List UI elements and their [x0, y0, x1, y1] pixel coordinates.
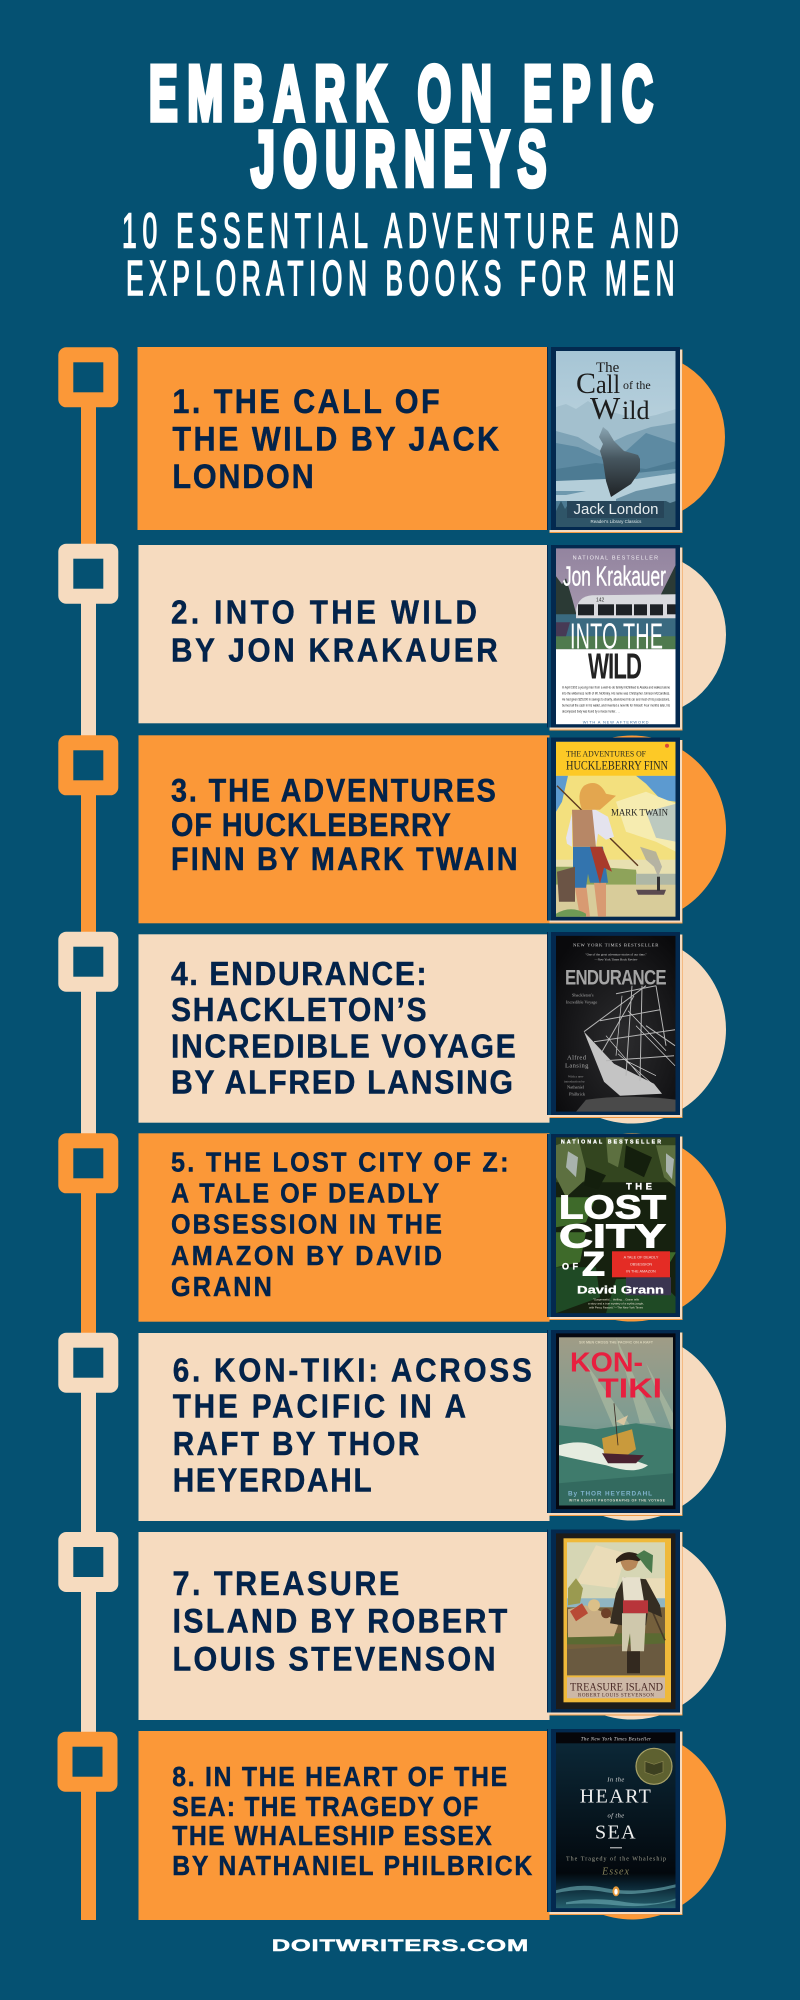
book cover: The Adventures of Huckleberry Finn: THE ADVENTURES OF: [566, 749, 646, 759]
book title: A TALE OF DEADLY: [171, 1177, 439, 1209]
timeline node 2: [58, 544, 118, 737]
book title: [171, 773, 518, 877]
book title: SHACKLETON’S: [171, 991, 427, 1028]
book cover: Kon-Tiki: WITH EIGHTY PHOTOGRAPHS OF THE VOYAGE: [569, 1498, 666, 1502]
timeline node 6: [58, 1333, 118, 1534]
book cover: The Lost City of Z: "Suspenseful… thrilling… Grann tells: [593, 1297, 640, 1301]
semicircle: [538, 1134, 726, 1322]
card: [138, 545, 550, 723]
book cover: Endurance: With a new: [568, 1075, 584, 1079]
book cover: The Lost City of Z: NATIONAL BESTSELLER: [561, 1139, 661, 1145]
book cover: In the Heart of the Sea: The Tragedy of the Whaleship: [566, 1855, 666, 1862]
panel: book 6: [138, 1330, 726, 1521]
book cover: In the Heart of the Sea: [547, 1729, 682, 1915]
book cover: The Call of the Wild: Jack London: [574, 501, 658, 518]
timeline node 8: [58, 1732, 118, 1920]
panel: book 2: [138, 545, 726, 730]
book title: [171, 955, 516, 1101]
panel: book 4: [138, 932, 726, 1124]
book cover: The Lost City of Z: CITY: [559, 1217, 666, 1254]
book title: [172, 1565, 508, 1678]
book cover: Treasure Island: TREASURE ISLAND: [570, 1679, 663, 1693]
book cover: The Lost City of Z: with Percy Fawcett."—The New York Times: [589, 1305, 643, 1309]
book cover: The Call of the Wild: Reader's Library Classics: [591, 519, 642, 524]
semicircle: [538, 1532, 726, 1720]
book cover: Endurance: [547, 932, 682, 1118]
book cover: The Lost City of Z: David Grann: [577, 1284, 664, 1296]
book cover: Endurance: introduction by: [564, 1080, 585, 1084]
book title: 5. THE LOST CITY OF Z:: [171, 1146, 509, 1178]
card: [138, 1333, 550, 1521]
book cover: Endurance: Lansing: [565, 1063, 589, 1070]
book cover: The Lost City of Z: A TALE OF DEADLY: [624, 1255, 659, 1259]
book title: THE WILD BY JACK: [172, 420, 500, 458]
book title: AMAZON BY DAVID: [171, 1240, 442, 1271]
book title: ISLAND BY ROBERT: [172, 1602, 508, 1640]
book title: 1. THE CALL OF: [172, 383, 440, 420]
book cover: The Lost City of Z: OF: [562, 1261, 578, 1271]
timeline node 7: [58, 1532, 118, 1734]
book cover: The Lost City of Z: Z: [582, 1245, 605, 1283]
book cover: Treasure Island: [547, 1530, 682, 1716]
book cover: In the Heart of the Sea: In the: [606, 1776, 625, 1783]
book title: THE WHALESHIP ESSEX: [172, 1820, 492, 1851]
book title: INCREDIBLE VOYAGE: [171, 1027, 516, 1065]
book title: HEYERDAHL: [173, 1462, 372, 1499]
book title: FINN BY MARK TWAIN: [171, 842, 518, 877]
semicircle: [555, 352, 725, 522]
book cover: Endurance: Shackleton's: [572, 993, 594, 998]
semicircle: [538, 1332, 726, 1520]
book cover: The Lost City of Z: IN THE AMAZON: [626, 1269, 656, 1273]
subtitle: 10 ESSENTIAL ADVENTURE AND: [122, 204, 679, 259]
title: JOURNEYS: [251, 116, 546, 203]
book title: RAFT BY THOR: [173, 1426, 420, 1462]
book cover: The Adventures of Huckleberry Finn: MARK TWAIN: [611, 808, 668, 818]
book cover: The Call of the Wild: ild: [622, 396, 649, 425]
book cover: The Call of the Wild: C: [576, 367, 596, 400]
subtitle: [122, 204, 679, 306]
book title: 8. IN THE HEART OF THE: [172, 1761, 507, 1792]
timeline node 1: [58, 347, 118, 546]
semicircle: [562, 552, 726, 716]
book title: 2. INTO THE WILD: [171, 594, 477, 631]
card: [138, 735, 550, 923]
book cover: The Call of the Wild: all: [596, 370, 620, 399]
book cover: Kon-Tiki: SIX MEN CROSS THE PACIFIC ON A RAFT: [579, 1340, 654, 1344]
book title: OBSESSION IN THE: [171, 1208, 442, 1240]
book cover: In the Heart of the Sea: HEART: [580, 1785, 652, 1807]
book title: [173, 1352, 532, 1499]
book title: 3. THE ADVENTURES: [171, 773, 496, 809]
book cover: Endurance: Alfred: [567, 1055, 587, 1062]
book title: BY JON KRAKAUER: [171, 632, 498, 669]
book cover: In the Heart of the Sea: Essex: [601, 1866, 630, 1877]
book cover: Into the Wild: NATIONAL BESTSELLER: [573, 555, 659, 561]
panel: book 3: [138, 735, 726, 924]
title: [149, 51, 653, 203]
semicircle: [538, 936, 726, 1124]
book cover: Endurance: Nathaniel: [567, 1085, 585, 1090]
book cover: The Adventures of Huckleberry Finn: [547, 738, 682, 924]
card: [138, 1133, 550, 1322]
book cover: The Lost City of Z: LOST: [559, 1188, 666, 1225]
book cover: Kon-Tiki: KON-: [570, 1346, 643, 1377]
book cover: In the Heart of the Sea: SEA: [595, 1821, 637, 1843]
card: [138, 1731, 550, 1920]
card: [138, 1532, 550, 1720]
book title: [172, 1761, 532, 1881]
panel: book 8: [138, 1729, 726, 1920]
book title: SEA: THE TRAGEDY OF: [172, 1791, 478, 1822]
book cover: Into the Wild: 142: [596, 597, 605, 603]
book cover: The Call of the Wild: [547, 347, 682, 533]
book cover: Into the Wild: Jon Krakauer: [563, 560, 666, 591]
book title: 7. TREASURE: [172, 1565, 399, 1602]
book cover: The Lost City of Z: THE: [626, 1181, 652, 1192]
semicircle: [538, 1730, 726, 1920]
timeline node 5: [58, 1133, 118, 1335]
book cover: Into the Wild: WILD: [588, 647, 642, 687]
panel: book 5: [138, 1133, 726, 1322]
book title: BY NATHANIEL PHILBRICK: [172, 1850, 532, 1881]
subtitle: EXPLORATION BOOKS FOR MEN: [126, 251, 675, 306]
book cover: Kon-Tiki: [547, 1330, 682, 1516]
book cover: Endurance: —New York Times Book Review: [594, 958, 638, 962]
book cover: The Lost City of Z: [547, 1134, 682, 1320]
book cover: The Lost City of Z: OBSESSION: [630, 1262, 652, 1266]
book cover: The Call of the Wild: W: [590, 390, 621, 426]
book title: [172, 383, 500, 495]
book cover: Into the Wild: WITH A NEW AFTERWORD: [583, 719, 649, 724]
book title: THE PACIFIC IN A: [173, 1388, 466, 1425]
book cover: Endurance: "One of the great adventure stories of our time.": [585, 953, 647, 957]
book cover: Endurance: Incredible Voyage: [566, 1000, 597, 1005]
book title: 4. ENDURANCE:: [171, 955, 427, 992]
card: [138, 934, 550, 1123]
card: [138, 347, 550, 530]
book title: GRANN: [171, 1271, 272, 1302]
book title: LONDON: [172, 458, 314, 495]
timeline node 4: [58, 932, 118, 1135]
book cover: Into the Wild: INTO THE: [570, 617, 663, 657]
book cover: Endurance: Philbrick: [569, 1092, 586, 1097]
footer: DOITWRITERS.COM: [272, 1935, 528, 1955]
timeline node 3: [58, 735, 118, 934]
title: EMBARK ON EPIC: [149, 51, 653, 137]
book cover: The Lost City of Z: a story and a true mystery of a mythic jungle,: [588, 1301, 644, 1305]
book title: BY ALFRED LANSING: [171, 1063, 513, 1101]
book cover: The Call of the Wild: The: [596, 360, 620, 376]
book cover: Kon-Tiki: TIKI: [598, 1372, 662, 1403]
book title: 6. KON-TIKI: ACROSS: [173, 1352, 532, 1389]
book cover: The Call of the Wild: of the: [623, 378, 651, 392]
panel: book 1: [138, 347, 725, 533]
book cover: Endurance: NEW YORK TIMES BESTSELLER: [573, 943, 659, 948]
book cover: Into the Wild: decomposed body was found by a moose hunter. . . .: [562, 709, 620, 713]
book cover: Kon-Tiki: By THOR HEYERDAHL: [568, 1490, 652, 1497]
book title: [171, 594, 498, 669]
book title: OF HUCKLEBERRY: [171, 808, 451, 843]
book cover: Into the Wild: [547, 545, 682, 730]
book cover: Treasure Island: ROBERT LOUIS STEVENSON: [578, 1693, 654, 1698]
book cover: In the Heart of the Sea: of the: [607, 1812, 625, 1819]
semicircle: [538, 736, 726, 924]
book title: LOUIS STEVENSON: [172, 1640, 496, 1678]
timeline: [58, 347, 118, 1920]
panel: book 7: [138, 1530, 726, 1720]
book cover: In the Heart of the Sea: The New York Times Bestseller: [581, 1737, 651, 1742]
book title: [171, 1146, 509, 1302]
book cover: Endurance: ENDURANCE: [565, 967, 667, 990]
